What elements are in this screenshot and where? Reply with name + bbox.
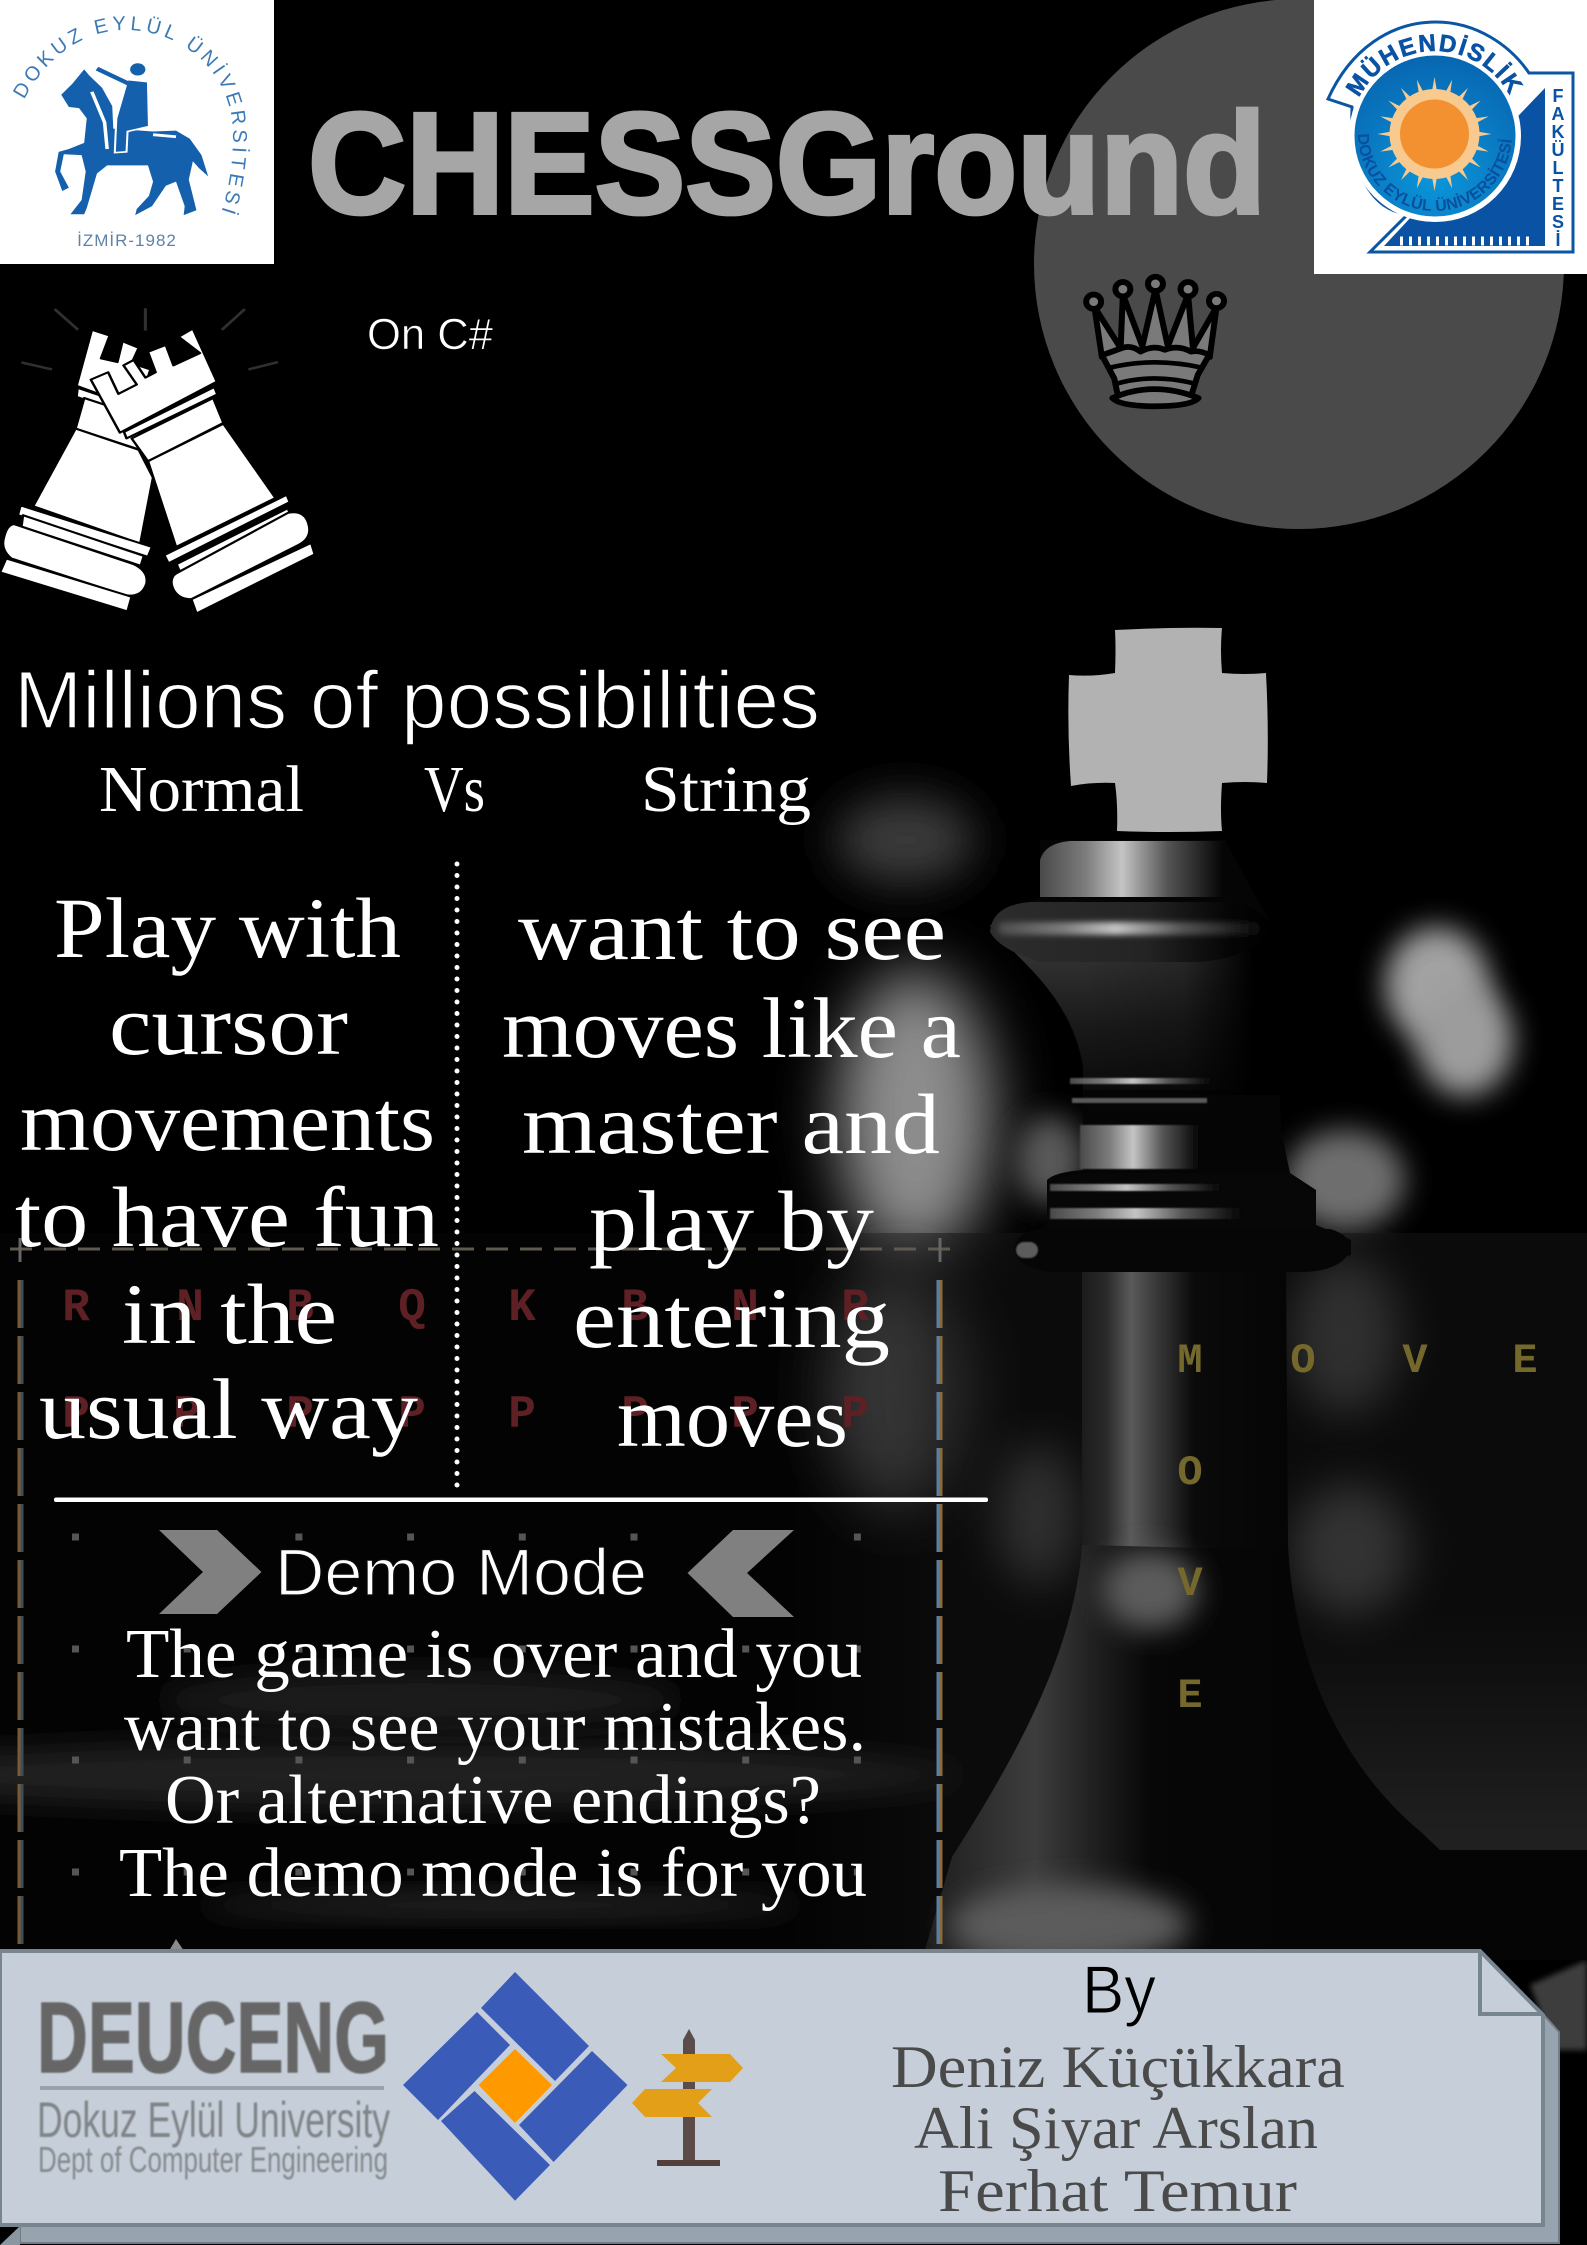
title: CHESSGround [308, 83, 1266, 244]
board reflection overlay [0, 1233, 1587, 1953]
pawn rank letters: P [731, 1389, 759, 1441]
empty square dots [72, 1537, 870, 1872]
vertical faculty label: T [1552, 176, 1564, 196]
lower collar [1047, 1173, 1316, 1229]
chess king photo [925, 628, 1587, 1965]
MOVE labels: E [1177, 1672, 1203, 1720]
text: demo mode description: The game is over and you [126, 1616, 862, 1693]
grey circle [1034, 0, 1564, 529]
university name arc: DOKUZ EYLÜL ÜNİVERSİTESİ [12, 16, 250, 215]
vertical faculty label: K [1552, 122, 1564, 142]
right rook [91, 329, 315, 614]
text: normal mode: usual way [39, 1361, 418, 1457]
text: string mode: entering [573, 1270, 890, 1366]
text: demo mode description [119, 1616, 867, 1912]
text: demo mode description: want to see your mistakes. [124, 1689, 866, 1766]
vertical faculty label: S [1552, 212, 1564, 232]
arrow: right chevron [688, 1530, 794, 1617]
university line: Dokuz Eylül University [37, 2092, 390, 2148]
mode labels: String [641, 753, 811, 826]
vertical faculty label: Ü [1552, 140, 1564, 160]
text: demo mode description: The demo mode is for you [119, 1835, 867, 1912]
vertical faculty label: F [1552, 86, 1564, 106]
king flared base [925, 1545, 1290, 1950]
back rank letters: B [286, 1282, 314, 1334]
logo: Faculty of Engineering [1314, 0, 1587, 274]
separator line [54, 1498, 988, 1502]
MOVE labels: O [1290, 1337, 1316, 1385]
department line: Dept of Computer Engineering [38, 2139, 388, 2180]
MOVE labels: V [1177, 1560, 1203, 1608]
mode labels: Normal [99, 753, 304, 826]
back rank letters: R [62, 1282, 90, 1334]
mode labels: Vs [424, 753, 485, 826]
impact rays [21, 308, 278, 369]
king shaft [1082, 1272, 1286, 1552]
back rank letters: N [176, 1282, 204, 1334]
text: normal mode: Play with [54, 880, 401, 976]
pawn rank letters: P [398, 1389, 426, 1441]
column divider [454, 864, 460, 1486]
icon: signpost [632, 2029, 743, 2166]
text: string mode: moves [617, 1369, 848, 1465]
text: string mode: want to see [518, 882, 946, 978]
mode labels [99, 753, 811, 826]
MOVE labels: E [1512, 1337, 1538, 1385]
small marker triangle [169, 1939, 184, 1951]
text: demo mode description: Or alternative endings? [165, 1762, 821, 1839]
author names [891, 2034, 1345, 2224]
heading: demo mode: Demo Mode [275, 1535, 647, 1609]
logo: Dokuz Eylül University [0, 0, 274, 264]
heading: millions of possibilities: Millions of possibilities [14, 655, 820, 746]
author names: Deniz Küçükkara [891, 2034, 1345, 2100]
MOVE labels [1177, 1337, 1538, 1720]
icon: diamond emblem [403, 1972, 628, 2201]
logo: DEUCENG [37, 1982, 390, 2180]
left rook [0, 330, 153, 611]
paper sheet [0, 1951, 1543, 2225]
text: string mode [502, 882, 961, 1465]
by label: By [1082, 1952, 1156, 2028]
vertical faculty label: E [1552, 194, 1564, 214]
MOVE labels: V [1402, 1337, 1428, 1385]
back rank letters: N [731, 1282, 759, 1334]
panel: credits [0, 1951, 1559, 2245]
folded corner [1480, 1951, 1543, 2014]
sun rays [1377, 77, 1492, 191]
emblem frame [1328, 22, 1573, 252]
text: normal mode [15, 880, 439, 1457]
subtitle: On C# [367, 310, 494, 359]
background photo: blurred chess pieces [0, 796, 1587, 2050]
text: normal mode: cursor [109, 977, 348, 1073]
board frame dashes [10, 1238, 950, 1945]
horse [55, 69, 208, 215]
MOVE labels: M [1177, 1337, 1203, 1385]
author names: Ali Şiyar Arslan [914, 2095, 1318, 2161]
base highlight [950, 1885, 1190, 1965]
white ring [1349, 50, 1521, 222]
pawn rank letters: P [62, 1389, 90, 1441]
ruler triangle [1384, 88, 1545, 246]
founding label: İZMİR-1982 [77, 231, 177, 250]
back rank letters: K [508, 1282, 536, 1334]
university name in disc: DOKUZ EYLÜL ÜNİVERSİTESİ [1358, 134, 1512, 211]
vertical faculty label: A [1552, 104, 1564, 124]
pawn rank letters: P [508, 1389, 536, 1441]
panel shadow [20, 2014, 1559, 2243]
vertical faculty label: L [1552, 158, 1564, 178]
king brim [990, 902, 1272, 962]
king cross [1068, 628, 1268, 832]
back rank letters: B [621, 1282, 649, 1334]
text: string mode: master and [522, 1076, 940, 1172]
pawn rank letters: P [173, 1389, 201, 1441]
sun disc [1400, 100, 1469, 168]
terminal chessboard overlay [10, 1238, 1538, 1945]
back rank letters: Q [398, 1282, 426, 1334]
text: string mode: play by [589, 1173, 874, 1269]
wordmark: DEUCENG [37, 1982, 389, 2094]
king body silhouette [925, 840, 1587, 1960]
wordmark rule [40, 2086, 384, 2090]
neck rings [1070, 1078, 1210, 1084]
pawn rank letters: P [621, 1389, 649, 1441]
arrow: left chevron [159, 1530, 262, 1614]
base flange [1014, 1229, 1351, 1272]
author names: Ferhat Temur [938, 2158, 1297, 2224]
vertical faculty label: İ [1555, 230, 1561, 250]
pawn rank letters: P [286, 1389, 314, 1441]
text: normal mode: to have fun [15, 1169, 439, 1265]
back rank letters: R [841, 1282, 869, 1334]
text: string mode: moves like a [502, 980, 961, 1076]
text: normal mode: in the [122, 1266, 337, 1362]
text: normal mode: movements [20, 1073, 435, 1169]
MOVE labels: O [1177, 1449, 1203, 1497]
icon: queen crown [1086, 277, 1224, 406]
king neck [990, 925, 1283, 1090]
king collar [1040, 841, 1222, 897]
icon: clashing rooks [0, 308, 315, 614]
blue disc [1354, 56, 1516, 216]
rider [115, 80, 149, 153]
pawn rank letters [62, 1389, 869, 1441]
pawn rank letters: P [841, 1389, 869, 1441]
faculty name arc: MÜHENDİSLİK [1345, 34, 1524, 97]
horse and rider statue [55, 63, 208, 215]
back rank letters [62, 1282, 869, 1334]
